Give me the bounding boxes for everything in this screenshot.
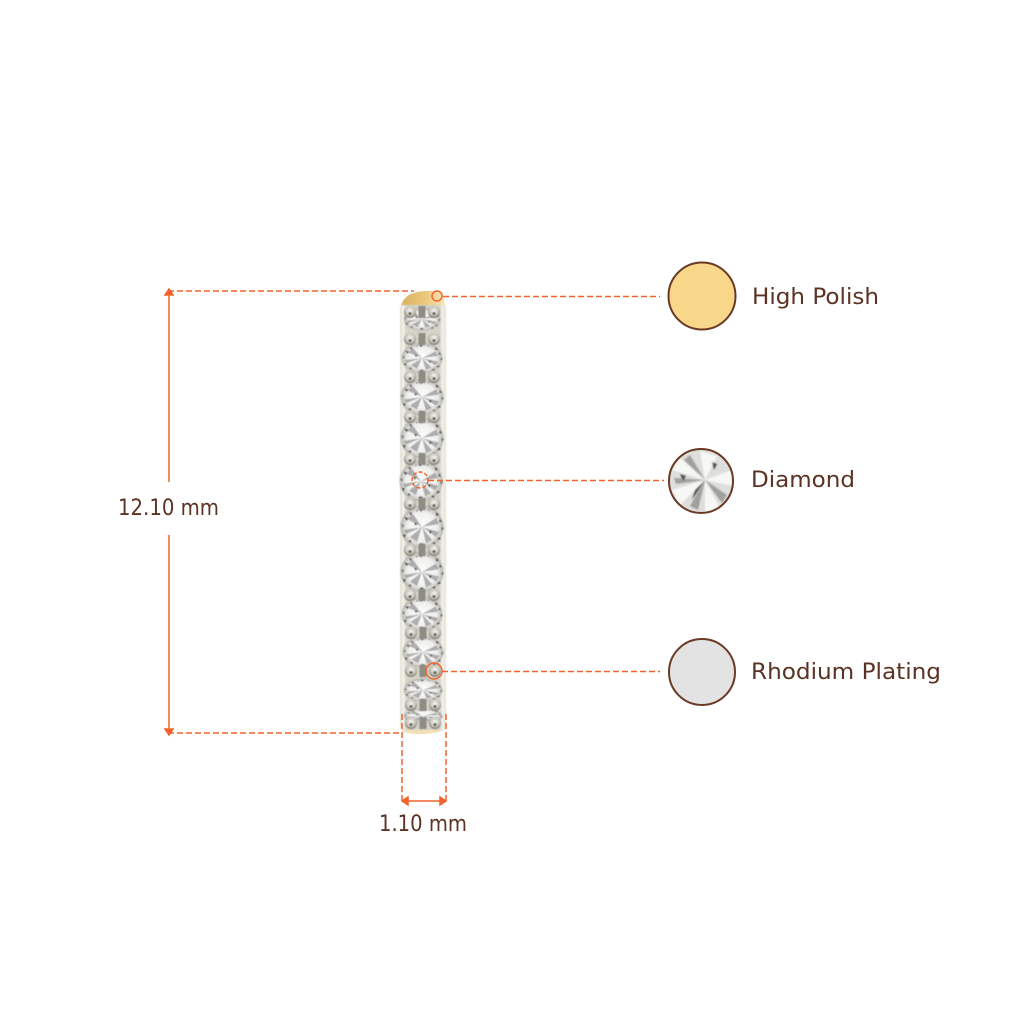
- swatch: diamond: [669, 449, 733, 513]
- label: height: 12.10 mm: [118, 496, 219, 521]
- callout leader: high polish: [432, 291, 660, 301]
- height dimension: 12.10 mm: [165, 289, 414, 735]
- label: rhodium plating: Rhodium Plating: [751, 660, 941, 685]
- diamond row: [400, 307, 444, 724]
- label: width: 1.10 mm: [379, 812, 467, 837]
- silver band: [400, 305, 446, 730]
- label: high polish: High Polish: [752, 285, 879, 310]
- ring: hoop earring side view: [400, 291, 446, 734]
- gold bottom of hoop: [402, 712, 446, 734]
- swatch: rhodium: [669, 639, 735, 705]
- gold top of hoop: [401, 291, 446, 309]
- swatch: high polish gold: [668, 262, 736, 330]
- width dimension: 1.10 mm: [402, 714, 446, 805]
- callout leader: rhodium plating: [426, 663, 660, 679]
- label: diamond: Diamond: [751, 468, 855, 493]
- prongs: [404, 306, 441, 729]
- callout leader: diamond: [412, 472, 664, 488]
